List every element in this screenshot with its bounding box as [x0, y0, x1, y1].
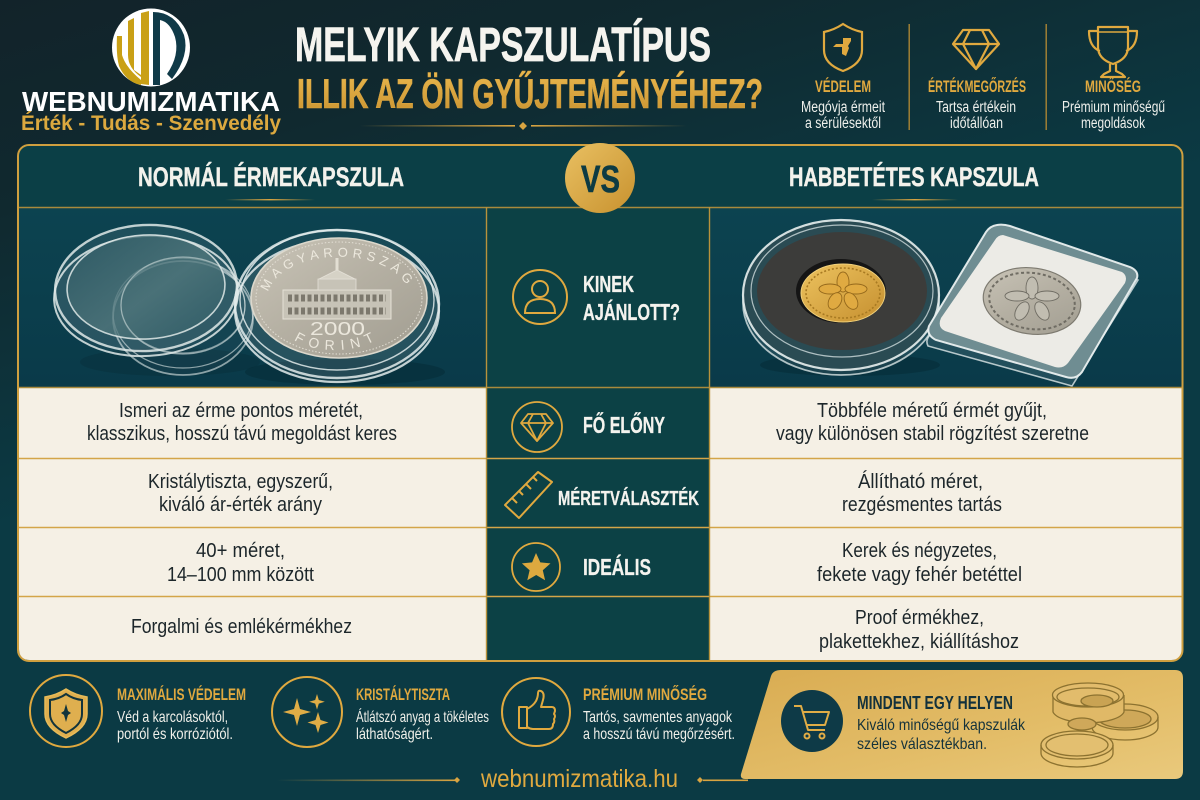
- icon: sparkles: [272, 677, 342, 747]
- icon: ruler: [505, 472, 552, 518]
- row: méret: fekete vagy fehér betéttel: [817, 564, 1022, 586]
- vs badge: [565, 143, 635, 213]
- feature: prémium minőség: PRÉMIUM MINŐSÉG: [583, 685, 707, 704]
- upper open lid: [51, 220, 245, 361]
- title: MELYIK KAPSZULATÍPUS: [295, 18, 711, 72]
- left rows: [19, 388, 486, 660]
- right heading: HABBETÉTES KAPSZULA: [789, 161, 1039, 192]
- row: fő előny: kiváló ár-érték arány: [159, 494, 322, 516]
- callout: mindent egy helyen: Kiváló minőségű kapszulák: [857, 717, 1026, 734]
- row: fő előny: [842, 470, 1002, 516]
- row: ideális: [819, 607, 1019, 653]
- feature: maximális védelem: [30, 675, 246, 747]
- callout: mindent egy helyen: széles választékban.: [857, 736, 987, 753]
- coin: [250, 237, 428, 359]
- coin: FORINT: [294, 332, 372, 350]
- top benefit: védelem: VÉDELEM: [815, 77, 871, 96]
- feature: maximális védelem: MAXIMÁLIS VÉDELEM: [117, 685, 246, 704]
- callout: mindent egy helyen: [741, 670, 1183, 779]
- right rows: [710, 388, 1182, 660]
- label: ideális: IDEÁLIS: [583, 553, 651, 580]
- square capsule: [927, 225, 1138, 386]
- coin building: [283, 258, 391, 319]
- icon: diamond: [953, 30, 999, 69]
- icon: person: [513, 270, 567, 324]
- row: ideális: Proof érmékhez,: [855, 607, 984, 629]
- top benefit: értékmegőrzés: Tartsa értékein: [936, 99, 1016, 116]
- feature: prémium minőség: a hosszú távú megőrzésért.: [583, 726, 735, 743]
- top benefit: védelem: [801, 24, 886, 132]
- foam capsule photo: [710, 208, 1182, 387]
- top benefit: értékmegőrzés: [928, 30, 1026, 132]
- top benefit: értékmegőrzés: ÉRTÉKMEGŐRZÉS: [928, 77, 1026, 96]
- illustration: capsule stack: [1041, 683, 1158, 767]
- panel frame: [18, 145, 1182, 661]
- brand tagline: Érték - Tudás - Szenvedély: [21, 112, 281, 135]
- brand name: WEBNUMIZMATIKA: [22, 86, 280, 117]
- top benefit: minőség: Prémium minőségű: [1062, 99, 1165, 116]
- round capsule: [743, 220, 939, 375]
- icon: shield badge: [30, 675, 102, 747]
- comparison panel: [17, 143, 1184, 662]
- feature: maximális védelem: portól és korróziótól.: [117, 726, 233, 743]
- feature: kristálytiszta: láthatóságért.: [356, 726, 433, 743]
- row: méret: 14–100 mm között: [167, 564, 314, 586]
- feature: kristálytiszta: KRISTÁLYTISZTA: [356, 685, 450, 704]
- top benefit: értékmegőrzés: időtállóan: [950, 115, 1003, 132]
- row: ajánlott: [87, 400, 397, 445]
- coin: MAGYARORSZÁG: [260, 248, 412, 291]
- website footer: webnumizmatika.hu: [480, 765, 678, 793]
- icon: trophy: [1089, 27, 1137, 77]
- lower open ring: [113, 258, 253, 375]
- vs badge: VS: [581, 159, 620, 201]
- feature: maximális védelem: Véd a karcolásoktól,: [117, 709, 228, 726]
- label: fő előny: FŐ ELŐNY: [583, 411, 665, 438]
- row: fő előny: [148, 471, 333, 516]
- header band: [19, 146, 1182, 207]
- center column: [486, 208, 710, 660]
- row: ideális: plakettekhez, kiállításhoz: [819, 631, 1019, 653]
- gold coin: [801, 264, 885, 322]
- label: kinek ajánlott: KINEK: [583, 271, 634, 297]
- icon: cart: [781, 690, 843, 752]
- feature: kristálytiszta: [272, 677, 489, 747]
- row: fő előny: rezgésmentes tartás: [842, 494, 1002, 516]
- top benefit: minőség: megoldások: [1081, 115, 1145, 132]
- label: méretválaszték: MÉRETVÁLASZTÉK: [558, 487, 699, 510]
- label: fő előny: [512, 402, 665, 452]
- row: ajánlott: Ismeri az érme pontos méretét,: [119, 400, 363, 422]
- row: ajánlott: Többféle méretű érmét gyűjt,: [817, 400, 1047, 422]
- normal capsule photo: [19, 208, 486, 385]
- label: kinek ajánlott: [513, 270, 680, 325]
- callout: mindent egy helyen: MINDENT EGY HELYEN: [857, 693, 1013, 713]
- label: ideális: [512, 543, 651, 591]
- icon: thumbs up: [502, 678, 570, 746]
- row: méret: 40+ méret,: [196, 540, 285, 562]
- icon: star: [512, 543, 560, 591]
- row: méret: Kerek és négyzetes,: [842, 540, 997, 562]
- feature: prémium minőség: [502, 678, 735, 746]
- label: kinek ajánlott: AJÁNLOTT?: [583, 298, 680, 325]
- website footer: [277, 765, 748, 793]
- top benefit: védelem: a sérülésektől: [805, 115, 881, 132]
- logo: [21, 8, 281, 135]
- row: ajánlott: klasszikus, hosszú távú megoldást keres: [87, 423, 397, 445]
- label: méretválaszték: [505, 472, 699, 518]
- top benefit: minőség: [1062, 27, 1165, 132]
- row: fő előny: Állítható méret,: [858, 470, 983, 493]
- icon: diamond: [512, 402, 562, 452]
- row: fő előny: Kristálytiszta, egyszerű,: [148, 471, 333, 493]
- row: ajánlott: vagy különösen stabil rögzítést szeretne: [776, 423, 1089, 445]
- silver coin: [979, 262, 1085, 340]
- row: méret: [817, 540, 1022, 586]
- title: [295, 18, 763, 117]
- row: méret: [167, 540, 314, 586]
- coin: 2000: [310, 319, 365, 339]
- row: ajánlott: [776, 400, 1089, 445]
- feature: prémium minőség: Tartós, savmentes anyagok: [583, 709, 733, 726]
- top benefit: védelem: Megóvja érmeit: [801, 99, 886, 116]
- title second line: ILLIK AZ ÖN GYŰJTEMÉNYÉHEZ?: [297, 70, 763, 117]
- left heading: NORMÁL ÉRMEKAPSZULA: [138, 161, 404, 192]
- row: ideális: Forgalmi és emlékérmékhez: [131, 616, 352, 638]
- feature: kristálytiszta: Átlátszó anyag a tökéletes: [356, 707, 489, 726]
- closed capsule ring: [235, 230, 439, 382]
- icon: shield: [824, 24, 862, 71]
- top benefit: minőség: MINŐSÉG: [1085, 77, 1141, 96]
